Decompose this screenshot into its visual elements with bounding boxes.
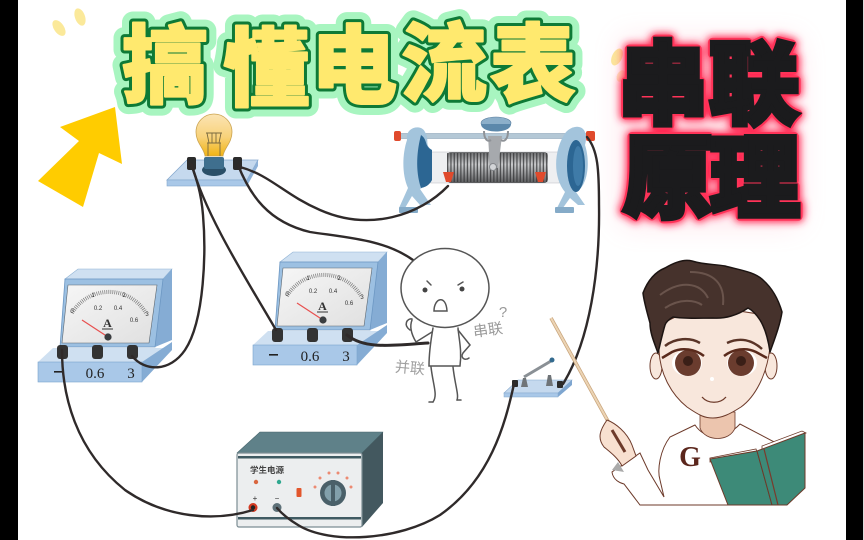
needle [82, 320, 108, 337]
terminals [57, 345, 138, 359]
range labels: 3 [127, 366, 135, 382]
title: 串联原理: 串 [618, 36, 708, 136]
title: 串联原理: 联 [709, 36, 799, 136]
title: 搞懂电流表: 懂 [223, 22, 309, 118]
light bulb on base [167, 114, 258, 186]
range labels: 0.6 [86, 366, 105, 382]
face [659, 305, 770, 418]
arrow: yellow pointing up-right [38, 107, 122, 207]
title: 搞懂电流表: 表 [490, 18, 576, 114]
title: 搞懂电流表: 电 [311, 19, 397, 115]
pointer stick [551, 318, 625, 452]
title: 搞懂电流表: 流 [401, 17, 487, 113]
title: 搞懂电流表: 流 [401, 17, 487, 113]
dial scale [287, 275, 361, 296]
ammeter: middle: 0.6 [345, 301, 354, 307]
stick figure [401, 248, 489, 402]
student power supply: + [253, 494, 258, 503]
ammeter: left: 3 [145, 312, 149, 318]
ammeter: left: 0.6 [130, 318, 139, 324]
slider [488, 136, 502, 168]
title: 搞懂电流表: 电 [311, 19, 397, 115]
switch [504, 358, 572, 397]
title: 串联原理: 串 [618, 36, 708, 136]
ammeter: left: A [103, 316, 112, 330]
handwritten label: 并联: 并联 [394, 359, 426, 378]
teacher character [551, 260, 806, 505]
decorative sparkles [50, 7, 627, 83]
range labels [86, 366, 135, 382]
ammeter body [65, 269, 172, 279]
title: 搞懂电流表: 表 [490, 18, 576, 114]
ammeter: middle: 0.2 [309, 289, 318, 295]
title: 搞懂电流表: 搞 [122, 19, 208, 115]
title: 串联原理: 理 [710, 130, 800, 230]
label: 学生电源: 学生电源 [250, 465, 284, 475]
book [762, 431, 806, 452]
needle [297, 303, 323, 320]
title: 串联原理: 联 [709, 36, 799, 136]
ammeter: middle: A [318, 299, 327, 313]
title: 串联原理 [618, 36, 800, 230]
rotary knob [320, 480, 346, 506]
title: 串联原理: 理 [710, 130, 800, 230]
title: 串联原理: 原 [623, 130, 713, 230]
title: 搞懂电流表: 搞 [122, 19, 208, 115]
ammeter: middle: 2 [337, 276, 341, 282]
range labels: 3 [342, 349, 350, 365]
sweater [612, 424, 780, 505]
ammeter: middle [253, 252, 387, 365]
mouth [702, 397, 726, 402]
title: 串联原理: 联 [709, 36, 799, 136]
cylinder [426, 152, 564, 183]
rod [400, 134, 587, 138]
hair [643, 260, 782, 353]
title: 串联原理: 理 [710, 130, 800, 230]
hand [600, 420, 636, 466]
red clips [394, 131, 595, 182]
title: 搞懂电流表: 表 [490, 18, 576, 114]
ammeter: left: 0.2 [94, 306, 103, 312]
handwritten label: 串联: 串联 [472, 320, 504, 341]
ammeter body [280, 252, 387, 262]
coil [447, 152, 548, 183]
ammeter: left [38, 269, 172, 382]
title: 搞懂电流表: 懂 [223, 22, 309, 118]
title: 搞懂电流表: 流 [401, 17, 487, 113]
handwritten question mark: ? [499, 304, 507, 321]
letter G: G [679, 442, 701, 473]
left stand [399, 127, 432, 208]
terminals [272, 328, 353, 342]
title: 搞懂电流表: 搞 [122, 19, 208, 115]
title: 串联原理: 原 [623, 130, 713, 230]
rheostat [394, 117, 595, 213]
brows [665, 339, 762, 349]
title: 搞懂电流表 [122, 17, 576, 118]
title: 搞懂电流表: 电 [311, 19, 397, 115]
ammeter: middle: 0 [285, 292, 289, 298]
eyes [672, 350, 702, 376]
ammeter: middle: 3 [360, 295, 364, 301]
range labels: 0.6 [301, 349, 320, 365]
ears [650, 353, 662, 379]
title: 串联原理: 原 [623, 130, 713, 230]
right stand [555, 127, 588, 212]
title: 搞懂电流表: 懂 [223, 22, 309, 118]
ammeter: middle: 0.4 [329, 289, 338, 295]
student power supply [237, 432, 383, 527]
neck [700, 412, 735, 438]
ammeter: middle: 1 [306, 276, 310, 282]
wires [62, 137, 599, 537]
ammeter: left: 0 [70, 309, 74, 315]
student power supply: − [275, 494, 280, 503]
title: 串联原理: 串 [618, 36, 708, 136]
ammeter: left: 1 [91, 293, 95, 299]
ammeter: left: 2 [122, 293, 126, 299]
ammeter: left: 0.4 [114, 306, 123, 312]
range labels [301, 349, 350, 365]
dial scale [72, 292, 146, 313]
